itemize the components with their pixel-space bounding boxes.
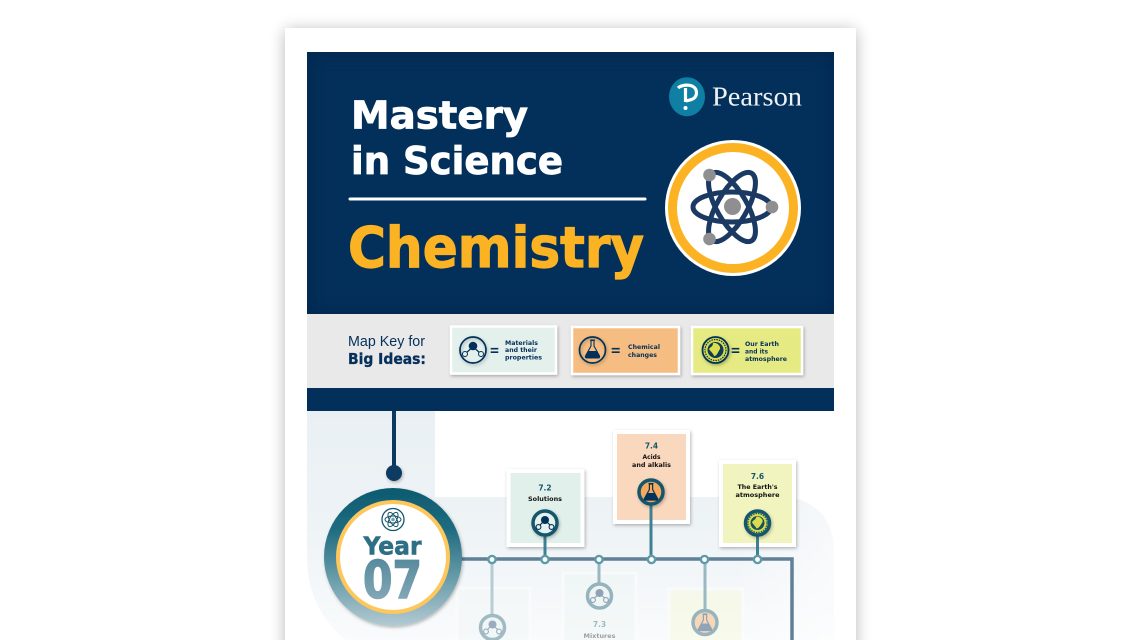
title divider	[348, 198, 646, 200]
title: Mastery in Science: Mastery	[351, 94, 528, 138]
branch 7.3: Mixtures	[584, 633, 616, 640]
connector from header	[392, 411, 396, 472]
key: our earth and its atmosphere	[692, 327, 802, 374]
icon: small atom	[382, 508, 404, 530]
card 7.4 acids and alkalis: 7.4	[645, 442, 658, 450]
branch 7.5	[669, 559, 743, 640]
connector dot	[386, 465, 402, 481]
key: chemical changes: Chemical	[628, 344, 660, 351]
key: our earth and its atmosphere: atmosphere	[745, 356, 787, 363]
key: our earth and its atmosphere: and its	[745, 349, 768, 356]
page sheet	[285, 28, 856, 640]
header banner	[307, 52, 834, 314]
timeline: year 07	[324, 411, 794, 640]
card 7.6 the earth's atmosphere	[721, 462, 794, 559]
key: materials and their properties: and their	[505, 347, 538, 354]
title: Mastery in Science	[351, 94, 563, 183]
route nodes	[488, 556, 761, 563]
card 7.2 solutions: Solutions	[528, 496, 562, 503]
card 7.2 solutions: 7.2	[538, 484, 552, 492]
icon: atom badge	[665, 140, 801, 276]
card 7.6 the earth's atmosphere: The Earth's	[738, 484, 778, 491]
key: materials and their properties: Materials	[505, 340, 538, 347]
branch 7.1	[457, 559, 530, 640]
map key heading: Map Key for	[348, 334, 425, 350]
key: materials and their properties: properties	[505, 354, 542, 362]
card 7.6 the earth's atmosphere: atmosphere	[736, 492, 780, 499]
map key heading: Big Ideas:	[348, 350, 426, 368]
map key band	[307, 314, 834, 389]
card 7.6 the earth's atmosphere: 7.6	[751, 472, 764, 481]
title: Mastery in Science: in Science	[351, 139, 563, 183]
navy bar	[307, 388, 834, 411]
year number: 07	[363, 551, 422, 611]
year label: Year	[363, 532, 422, 560]
map key heading	[348, 334, 426, 368]
branch 7.3: 7.3	[593, 620, 606, 629]
year badge	[324, 488, 462, 626]
horizontal route	[460, 559, 792, 640]
key: chemical changes	[572, 327, 679, 374]
timeline background	[307, 411, 835, 640]
key: chemical changes: changes	[628, 352, 657, 359]
card 7.4 acids and alkalis: and alkalis	[632, 462, 671, 469]
logo: Pearson: Pearson	[712, 82, 803, 112]
title: Chemistry: Chemistry	[348, 216, 644, 281]
card 7.2 solutions	[508, 471, 582, 559]
card 7.4 acids and alkalis	[615, 432, 688, 559]
card 7.4 acids and alkalis: Acids	[642, 454, 661, 461]
logo: Pearson	[669, 77, 803, 116]
key: our earth and its atmosphere: Our Earth	[745, 341, 779, 348]
key: materials and their properties	[451, 326, 556, 374]
branch 7.3	[563, 559, 636, 640]
